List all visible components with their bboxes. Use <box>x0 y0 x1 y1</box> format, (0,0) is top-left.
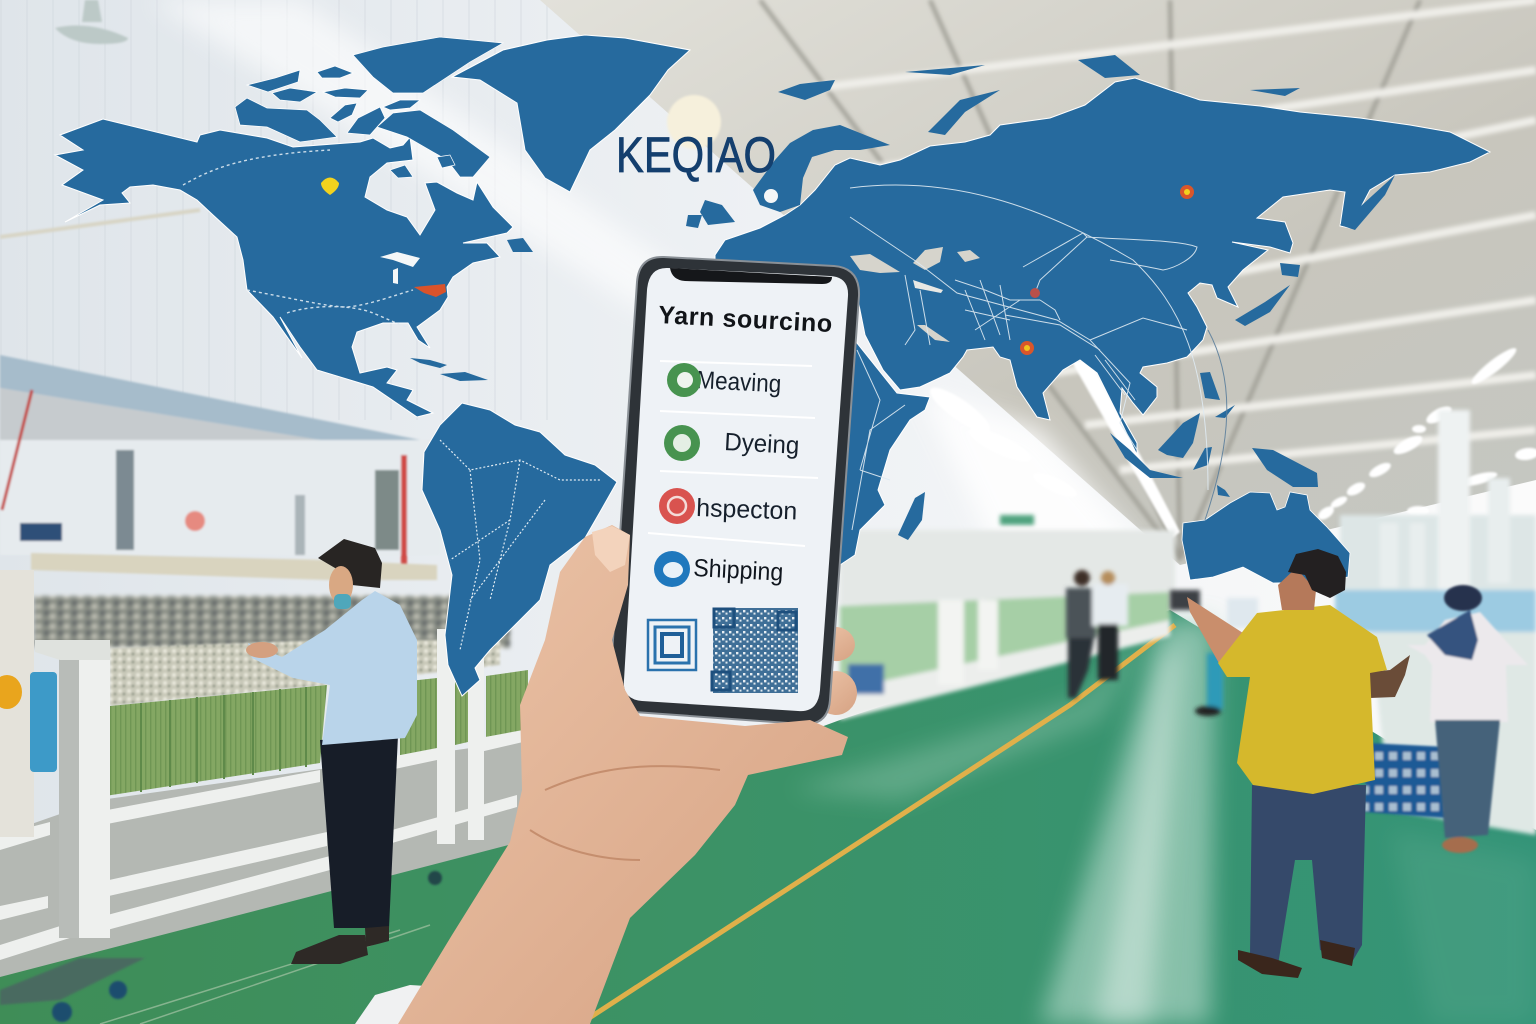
phone screen <box>624 268 848 711</box>
map: Eurasia <box>715 78 1490 455</box>
map: Madagascar <box>898 492 925 540</box>
title: KEQIAO: KEQIAO <box>616 127 776 183</box>
world map <box>55 35 1490 696</box>
row: Inspection: hspecton <box>696 494 798 526</box>
map: Scandinavia <box>753 125 890 212</box>
row: Weaving <box>667 363 782 398</box>
row: Shipping: Shipping <box>693 554 784 587</box>
thumbnail <box>592 526 630 572</box>
row: Shipping <box>654 551 784 587</box>
map: Arctic Canada islands <box>235 37 503 178</box>
map: South America borders <box>440 440 600 650</box>
left machine: yarn creel <box>31 553 528 796</box>
map: Japan and Kamchatka <box>1235 175 1395 326</box>
phone body <box>610 257 859 724</box>
map marker: US east coast <box>414 284 446 297</box>
map marker: Canada <box>321 178 339 195</box>
palm and thumb <box>398 525 848 1024</box>
row: Dyeing: Dyeing <box>724 428 800 460</box>
row dividers <box>648 361 818 546</box>
overhead beam <box>31 553 437 580</box>
palm shading <box>530 766 720 860</box>
ceiling glare and lights <box>920 390 1150 560</box>
map: Greenland <box>452 35 690 192</box>
map: Africa east <box>835 300 930 565</box>
row: Inspection <box>659 488 798 526</box>
yellow stop button <box>0 675 22 709</box>
sleeve <box>355 985 520 1024</box>
map marker: India <box>1020 341 1034 355</box>
worker in blue shirt <box>246 539 417 964</box>
woman in white <box>1407 585 1528 853</box>
map: North America <box>55 119 513 417</box>
far machines along aisle <box>840 515 1175 720</box>
floor lines left <box>100 925 430 1024</box>
yellow floor line <box>580 625 1175 1024</box>
head of worker in yellow shirt, in front of map <box>1278 549 1346 610</box>
blue crate <box>1364 743 1447 818</box>
right area: columns and blue bins <box>1335 410 1536 835</box>
logo mark <box>648 620 696 670</box>
row: Dyeing <box>664 425 800 461</box>
dark creel band <box>34 596 510 648</box>
map marker: Central Asia <box>1030 288 1040 298</box>
map: Newfoundland <box>507 238 533 252</box>
map: Southeast Asia islands <box>1110 372 1318 497</box>
left wall pipes and fittings <box>0 355 440 570</box>
ceiling <box>540 0 1536 565</box>
yarn cones <box>110 640 500 706</box>
control panel <box>0 570 34 837</box>
screen heading: Yarn sourcino <box>658 301 833 338</box>
map: Australia <box>1182 492 1350 583</box>
blue tank <box>30 672 57 772</box>
green yarn packs <box>105 685 327 796</box>
map: route and border lines <box>183 150 1227 530</box>
notch <box>670 268 832 284</box>
row: Weaving: Meaving <box>696 366 782 398</box>
hand holding phone <box>355 525 848 1024</box>
distant workers <box>1066 570 1258 716</box>
map: British Isles <box>686 80 835 228</box>
cart on wheels <box>0 871 442 1022</box>
hand fingers behind phone <box>813 624 859 717</box>
left machine: undercarriage <box>0 740 528 977</box>
hanging lamps <box>55 0 721 149</box>
map: Caribbean <box>410 358 488 381</box>
cable on wall <box>0 210 200 237</box>
map: Great Lakes <box>380 252 420 267</box>
floor <box>0 610 1536 1024</box>
grey pillar <box>59 640 81 938</box>
smartphone <box>610 257 859 724</box>
left machine: white frame <box>0 570 523 960</box>
map: inland seas <box>764 189 980 342</box>
QR code <box>712 608 798 693</box>
map marker: Siberia <box>1180 185 1194 199</box>
worker in yellow shirt <box>1187 597 1410 978</box>
map: South America <box>422 403 617 696</box>
map: Arctic Russia islands <box>905 55 1300 135</box>
